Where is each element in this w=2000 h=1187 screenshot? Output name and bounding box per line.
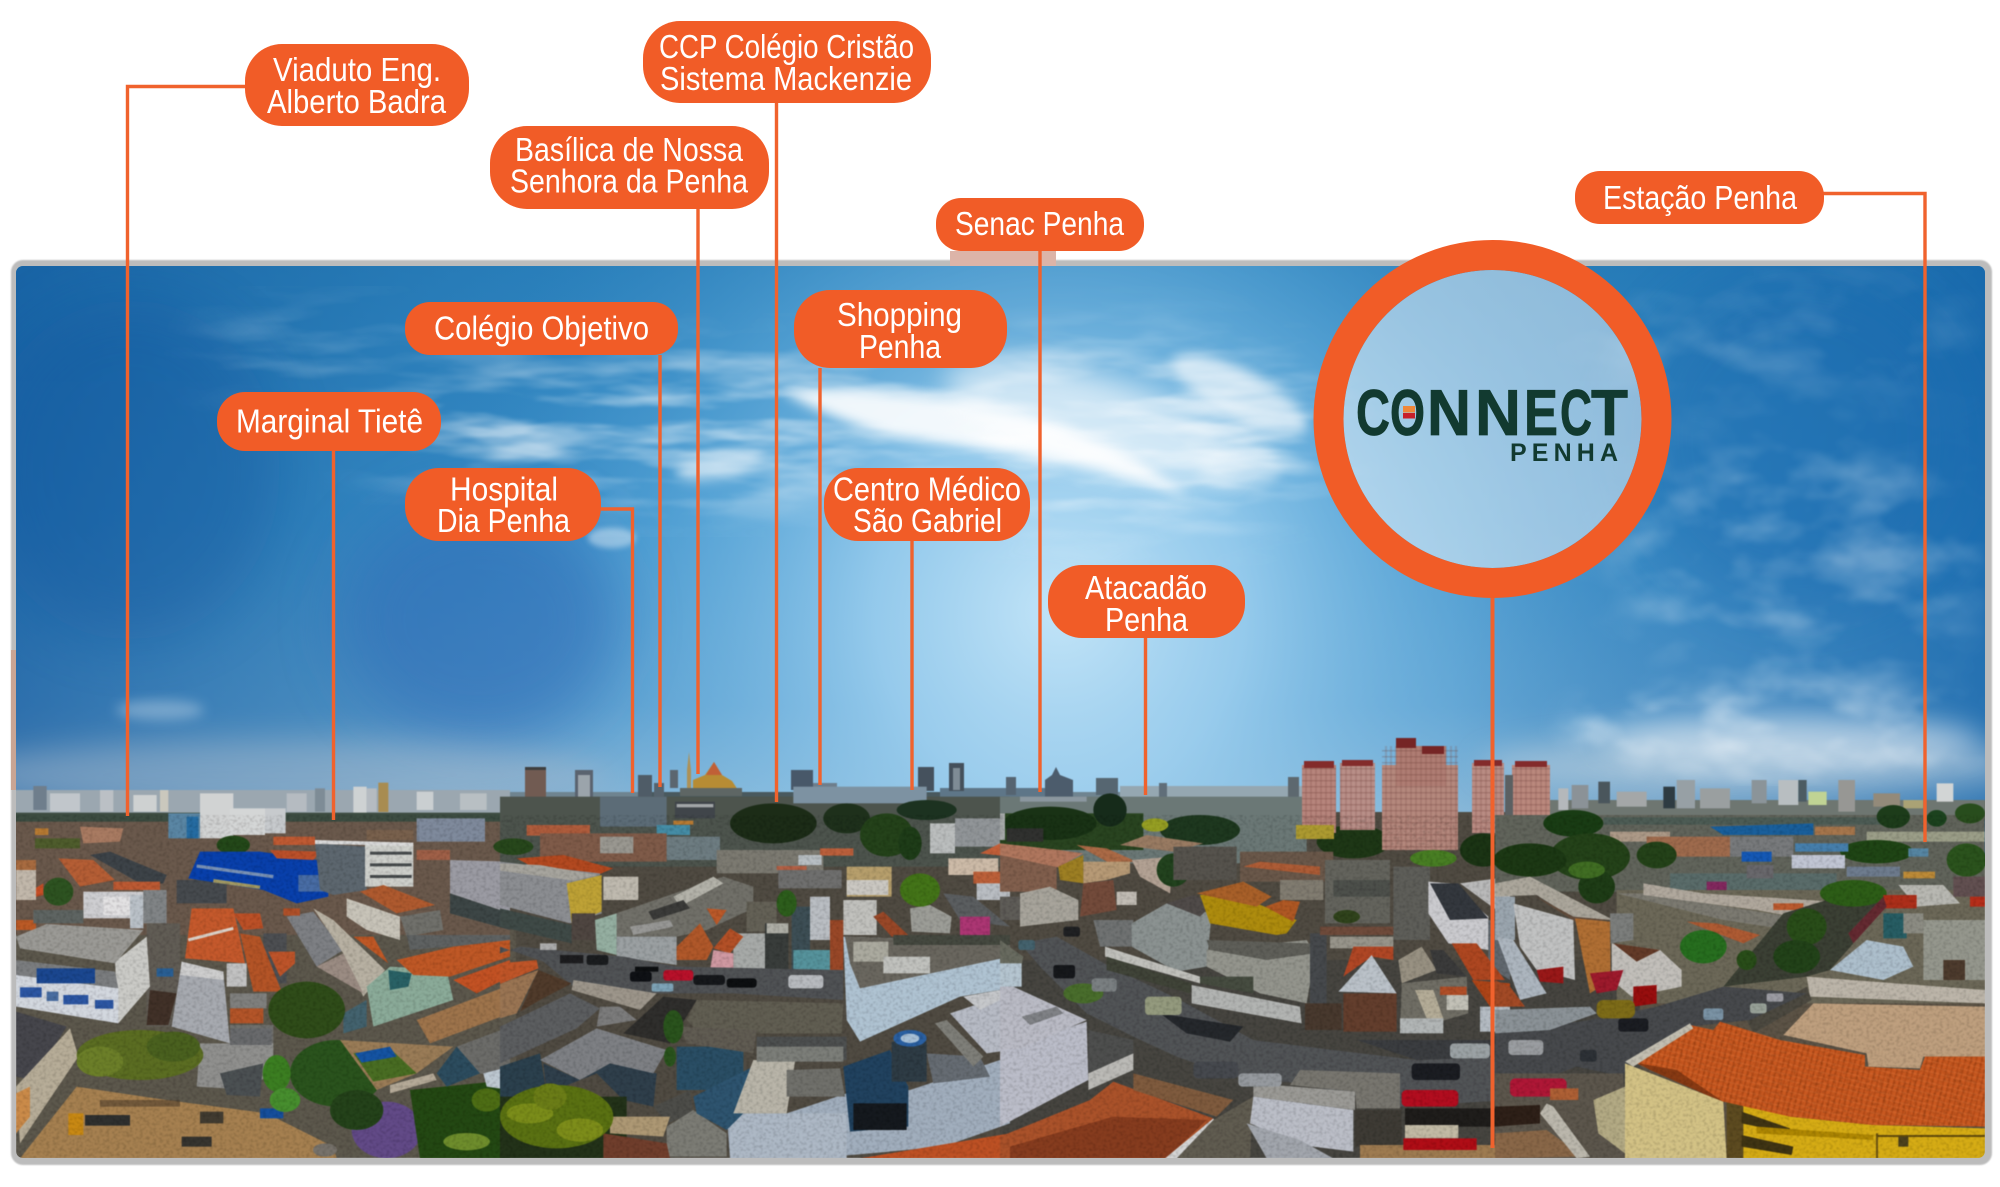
small white building bbox=[1253, 1083, 1355, 1110]
concrete yard bbox=[197, 1043, 273, 1090]
label pill bbox=[936, 198, 1144, 251]
logo: CONNECT PENHA: T bbox=[1591, 376, 1628, 449]
panel: aerial panorama of Penha bbox=[0, 266, 2000, 1158]
grey roofs bbox=[572, 980, 657, 1010]
orange roofs and wedge block bbox=[185, 908, 245, 963]
distant skyline centre bbox=[510, 786, 1302, 798]
logo: CONNECT PENHA bbox=[1356, 376, 1628, 467]
callout: Viaduto Eng. Alberto Badra bbox=[128, 44, 469, 816]
logo: CONNECT PENHA: PENHA bbox=[1510, 439, 1618, 467]
callout: Centro Médico São Gabriel bbox=[824, 468, 1030, 790]
sky bbox=[0, 266, 2000, 866]
long apartment block bbox=[517, 855, 613, 874]
label text: Alberto Badra bbox=[267, 83, 447, 120]
callout: Shopping Penha bbox=[794, 290, 1007, 785]
label pill bbox=[245, 44, 469, 126]
street vehicles bbox=[1193, 1062, 1238, 1078]
label text: São Gabriel bbox=[853, 502, 1002, 539]
orange house with white gable bbox=[1343, 947, 1393, 977]
marker: Connect Penha project location bbox=[1328, 255, 1656, 1148]
logo: CONNECT PENHA: E bbox=[1524, 376, 1558, 449]
connector line bbox=[658, 355, 662, 787]
pool bbox=[340, 1040, 453, 1090]
label pill bbox=[1048, 565, 1245, 638]
callout: Estação Penha bbox=[1575, 171, 1925, 842]
ground base tone bbox=[16, 812, 1985, 1158]
label text: Centro Médico bbox=[833, 470, 1021, 508]
cream wall and yellow facade bbox=[1625, 1063, 1727, 1158]
middle low block bbox=[1207, 940, 1315, 1003]
callout: Atacadão Penha bbox=[1048, 565, 1245, 795]
red truck bbox=[1405, 1108, 1510, 1127]
street and cars bbox=[500, 947, 843, 1000]
mid houses bbox=[347, 898, 400, 940]
label text: Estação Penha bbox=[1603, 179, 1798, 216]
skyline right bbox=[1550, 800, 1987, 820]
trees bbox=[77, 1030, 203, 1080]
photo region: centre bbox=[493, 787, 1010, 1158]
mint house and tan wall bbox=[367, 967, 453, 1027]
label pill bbox=[405, 302, 678, 355]
photo region: left third bbox=[0, 783, 510, 1158]
connector line bbox=[910, 541, 914, 790]
foreground white building bbox=[843, 937, 1010, 1042]
connector line bbox=[1038, 251, 1042, 792]
city grain texture bbox=[16, 815, 1985, 1158]
label pill bbox=[405, 468, 601, 541]
label pill bbox=[824, 468, 1030, 541]
label text: Hospital bbox=[450, 470, 558, 508]
left white roof building bbox=[1000, 940, 1023, 965]
orange ring with translucent centre bbox=[1344, 270, 1642, 568]
label text: Shopping bbox=[837, 296, 962, 333]
photo region: right of centre bbox=[1000, 793, 1510, 1158]
building cluster bbox=[1495, 877, 1613, 920]
connector line bbox=[332, 451, 335, 820]
clouds bbox=[15, 266, 1985, 786]
bottom-left tree bbox=[500, 1097, 627, 1158]
callout: Basílica de Nossa Senhora da Penha bbox=[490, 126, 769, 774]
logo: CONNECT PENHA: N bbox=[1427, 376, 1471, 449]
label text: Atacadão bbox=[1085, 569, 1207, 606]
label text: Viaduto Eng. bbox=[273, 51, 441, 88]
label text: Dia Penha bbox=[437, 502, 571, 539]
label text: Marginal Tietê bbox=[236, 402, 423, 440]
connector line bbox=[775, 103, 778, 802]
cars bbox=[1508, 1040, 1543, 1055]
label text: Senac Penha bbox=[955, 205, 1125, 242]
label text: Senhora da Penha bbox=[510, 162, 749, 200]
construction ground bbox=[20, 1087, 337, 1158]
label pill bbox=[217, 392, 441, 451]
street block houses bbox=[597, 877, 753, 937]
label text: Basílica de Nossa bbox=[515, 131, 744, 168]
label pill bbox=[490, 126, 769, 209]
large orange tiled roof bbox=[1637, 1022, 1985, 1127]
label text: CCP Colégio Cristão bbox=[659, 28, 914, 65]
mid lots bbox=[1617, 890, 1985, 1003]
skyline left bbox=[0, 790, 510, 814]
road bbox=[1020, 937, 1510, 1107]
lower left lot bbox=[1495, 1073, 1625, 1158]
panel: panoramic photo frame shadow bbox=[11, 260, 1992, 1165]
callout: Colégio Objetivo bbox=[405, 302, 678, 787]
blue building bbox=[188, 852, 328, 903]
photo region: right side bbox=[1493, 780, 1987, 1158]
connector line bbox=[1144, 638, 1147, 795]
grey office building bbox=[315, 843, 367, 895]
logo: CONNECT PENHA: N bbox=[1475, 376, 1521, 449]
lower-left shed bbox=[16, 1012, 67, 1080]
left edge tint bbox=[11, 650, 16, 790]
connector line bbox=[818, 368, 822, 785]
label pill bbox=[1575, 171, 1824, 224]
label text: Sistema Mackenzie bbox=[660, 60, 912, 97]
label text: Penha bbox=[1105, 601, 1189, 638]
logo: CONNECT PENHA: O bbox=[1390, 376, 1425, 449]
label pill bbox=[643, 21, 931, 103]
label text: Penha bbox=[859, 328, 942, 365]
logo: CONNECT PENHA: C bbox=[1560, 376, 1592, 449]
residential towers bbox=[1296, 738, 1550, 851]
logo: CONNECT PENHA: C bbox=[1356, 376, 1390, 449]
label pill bbox=[794, 290, 1007, 368]
grey house and yellow house bbox=[1132, 903, 1212, 972]
connector line bbox=[696, 209, 700, 774]
callout: Hospital Dia Penha bbox=[405, 468, 632, 793]
distant towers and basilica bbox=[524, 752, 1300, 798]
label text: Colégio Objetivo bbox=[434, 310, 649, 346]
connector line bbox=[601, 509, 632, 793]
connector line bbox=[1490, 590, 1494, 1148]
shadow tint under Senac label bbox=[950, 251, 1056, 266]
white building with blue windows bbox=[147, 923, 180, 1027]
callout: CCP Colégio Cristão Sistema Mackenzie bbox=[643, 21, 931, 802]
road bbox=[1495, 987, 1807, 1097]
dark treetops bbox=[730, 803, 817, 843]
callout: Senac Penha bbox=[936, 198, 1144, 792]
callout: Marginal Tietê bbox=[217, 392, 441, 820]
connector line bbox=[128, 86, 245, 816]
far trees and roofs bbox=[1543, 810, 1603, 837]
neighbourhood roofs bbox=[80, 827, 123, 843]
houses to the right bbox=[1398, 947, 1437, 983]
ground: city photograph bbox=[0, 738, 1987, 1158]
connector line bbox=[1823, 194, 1925, 842]
orange tiled roof bottom centre bbox=[1000, 1082, 1213, 1158]
